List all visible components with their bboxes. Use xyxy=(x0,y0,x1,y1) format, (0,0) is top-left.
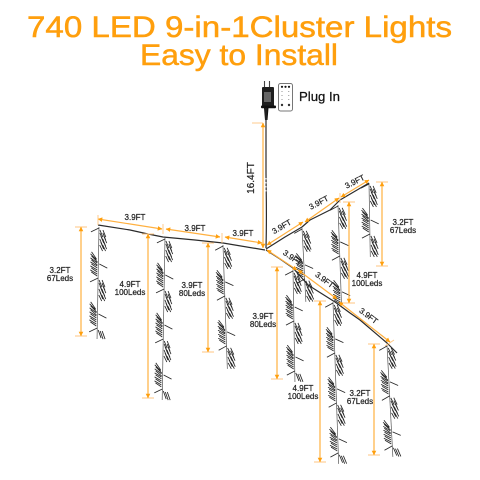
dimension: right strand 3 height: 67Leds xyxy=(390,226,416,235)
dimension: left cable segment 3: 3.9FT xyxy=(233,229,254,238)
main cable network xyxy=(98,108,397,353)
title: 740 LED 9-in-1Cluster Lights xyxy=(27,11,452,44)
dimension: lower strand 2 height: 100Leds xyxy=(288,392,318,401)
strand: right 2 xyxy=(330,205,350,305)
dimension: upper right segment 2: 3.9FT xyxy=(307,194,330,212)
dimension: left strand 2 height xyxy=(115,234,154,398)
dimension: left strand 2 height: 4.9FT xyxy=(120,280,141,289)
dimension: left strand 1 height: 67Leds xyxy=(47,274,73,283)
label: plug in: Plug In xyxy=(299,90,340,104)
title xyxy=(27,11,452,72)
dimension: lower right segment 1: 3.9FT xyxy=(281,248,304,268)
dimension: 16.4FT power lead xyxy=(246,123,263,248)
dimension: upper right segment 3 xyxy=(341,173,369,197)
dimension: left strand 1 height: 3.2FT xyxy=(50,266,71,275)
strand: lower 3 xyxy=(379,345,402,457)
dimension: left cable segment 1: 3.9FT xyxy=(125,213,146,222)
dimension: right strand 3 height xyxy=(376,182,416,266)
dimension: lower strand 2 height xyxy=(288,301,326,462)
dimension: upper right segment 3: 3.9FT xyxy=(344,173,366,191)
dimension: lower strand 3 height xyxy=(347,344,380,455)
dimension: left strand 3 height: 80Leds xyxy=(179,289,205,298)
dimension: lower strand 3 height: 3.2FT xyxy=(350,389,371,398)
strand: right 1 xyxy=(294,228,315,302)
icon: remote control xyxy=(278,84,292,111)
strand: left 1 xyxy=(89,227,108,339)
dimension: left cable segment 2 xyxy=(166,224,222,243)
dimension: left cable segment 2: 3.9FT xyxy=(185,224,206,233)
strand: lower 1 xyxy=(285,270,304,382)
dimension: lower right segment 2: 3.9FT xyxy=(313,270,336,290)
dimension: lower right segment 3: 3.9FT xyxy=(357,306,380,326)
dimension: right strand 3 height: 3.2FT xyxy=(393,218,414,227)
dimension: left strand 2 height: 100Leds xyxy=(115,288,145,297)
dimension: left cable segment 1 xyxy=(98,213,163,234)
dimension: 16.4FT power lead: 16.4FT xyxy=(246,162,257,194)
dimension: lower right segment 1 xyxy=(267,248,304,270)
dimension: left strand 1 height xyxy=(47,227,87,336)
dimension: lower right segment 3 xyxy=(339,302,394,346)
dimension: upper right segment 2 xyxy=(305,193,340,222)
dimension: upper right segment 1: 3.9FT xyxy=(270,218,293,236)
dimension: lower strand 1 height: 80Leds xyxy=(250,320,276,329)
dimension: lower strand 1 height: 3.9FT xyxy=(253,312,274,321)
strand: lower 2 xyxy=(325,302,348,464)
dimension: left cable segment 3 xyxy=(225,229,262,243)
icon: power plug adapter xyxy=(261,81,276,120)
dimension: left strand 3 height: 3.9FT xyxy=(182,281,203,290)
title: Easy to Install xyxy=(140,39,338,72)
dimension: lower right segment 2 xyxy=(298,270,337,299)
strand: left 3 xyxy=(215,245,236,369)
dimension: lower strand 2 height: 4.9FT xyxy=(293,384,314,393)
dimension: right strand 2 height xyxy=(343,202,382,303)
dimension: upper right segment 1 xyxy=(267,218,303,245)
dimension: lower strand 1 height xyxy=(250,267,283,379)
strand: left 2 xyxy=(154,238,174,400)
dimension: right strand 2 height: 100Leds xyxy=(352,279,382,288)
dimension: left strand 3 height xyxy=(179,243,214,352)
dimension: lower strand 3 height: 67Leds xyxy=(347,397,373,406)
strand: right 3 xyxy=(361,183,379,257)
dimension: right strand 2 height: 4.9FT xyxy=(357,271,378,280)
